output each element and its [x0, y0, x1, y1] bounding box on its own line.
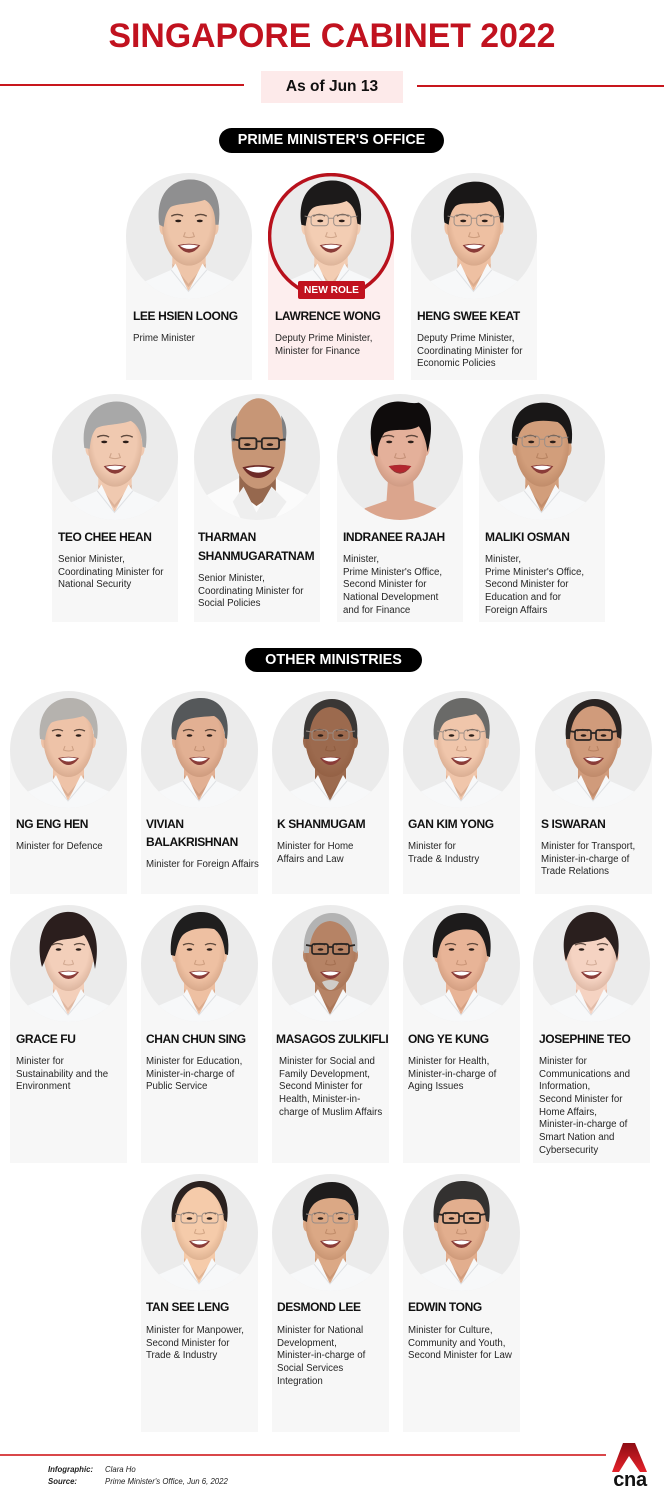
portrait: [126, 173, 252, 292]
title: SINGAPORE CABINET 2022: [108, 17, 555, 55]
portrait: [535, 691, 652, 802]
role: Prime Minister's Office,: [485, 567, 584, 578]
role: Minister for: [408, 841, 456, 852]
role: Minister for Defence: [16, 841, 103, 852]
portrait: [403, 691, 520, 802]
portrait: [337, 394, 463, 520]
role: Minister for Foreign Affairs: [146, 859, 259, 870]
role: Minister for Transport,: [541, 841, 635, 852]
portrait: [403, 905, 520, 1016]
role: Minister for Manpower,: [146, 1325, 244, 1336]
portrait: [272, 691, 389, 802]
name: TEO CHEE HEAN: [58, 530, 151, 544]
role: Home Affairs,: [539, 1107, 597, 1118]
name: [146, 817, 238, 849]
role: Minister for National: [277, 1325, 363, 1336]
role: Second Minister for: [539, 1094, 622, 1105]
role: Minister-in-charge of: [146, 1069, 234, 1080]
name: THARMAN: [198, 530, 256, 544]
card: Indranee Rajah: [337, 394, 463, 622]
name: SHANMUGARATNAM: [198, 548, 314, 562]
icon: cna logo: [612, 1443, 648, 1491]
role: Minister for Culture,: [408, 1325, 493, 1336]
role: Economic Policies: [417, 358, 496, 369]
name: [198, 530, 314, 562]
card: Tharman Shanmugaratnam: [194, 394, 320, 622]
new role badge: [298, 281, 365, 299]
role: Minister-in-charge of: [277, 1350, 365, 1361]
portrait: [10, 691, 127, 802]
role: Integration: [277, 1376, 323, 1387]
card: Teo Chee Hean: [52, 394, 178, 589]
portrait: [403, 1174, 520, 1284]
role: Community and Youth,: [408, 1338, 505, 1349]
role: [146, 1056, 242, 1092]
role: Minister for: [16, 1056, 64, 1067]
card: Vivian Balakrishnan: [141, 691, 258, 869]
role: [275, 333, 372, 357]
role: Prime Minister's Office,: [343, 567, 442, 578]
role: Foreign Affairs: [485, 605, 547, 616]
role: [408, 1325, 512, 1361]
role: Senior Minister,: [58, 554, 125, 565]
role: Social Services: [277, 1363, 343, 1374]
role: [485, 554, 584, 616]
portrait: [194, 394, 320, 520]
role: Affairs and Law: [277, 854, 344, 865]
name: MASAGOS ZULKIFLI: [276, 1032, 388, 1046]
role: [277, 841, 353, 865]
role: Senior Minister,: [198, 573, 265, 584]
portrait: [141, 905, 258, 1016]
portrait: [272, 1174, 389, 1284]
name: GAN KIM YONG: [408, 817, 494, 831]
role: Coordinating Minister for: [58, 567, 164, 578]
card: Maliki Osman: [479, 394, 605, 622]
name: EDWIN TONG: [408, 1300, 482, 1314]
heading: other ministries: [245, 648, 422, 672]
role: [539, 1056, 630, 1156]
role: Minister for Finance: [275, 346, 360, 357]
role: [541, 841, 635, 877]
role: Public Service: [146, 1081, 207, 1092]
portrait with red ring: [268, 173, 394, 290]
role: [408, 1056, 496, 1092]
date badge: As of Jun 13: [286, 78, 378, 95]
card: Chan Chun Sing: [141, 905, 258, 1089]
new role badge: NEW ROLE: [304, 285, 359, 296]
card: S Iswaran: [535, 691, 652, 894]
role: [198, 573, 304, 609]
role: Deputy Prime Minister,: [417, 333, 514, 344]
heading: other ministries: OTHER MINISTRIES: [265, 652, 402, 668]
portrait: [10, 905, 127, 1016]
card: Grace Fu: [10, 905, 127, 1089]
portrait: [52, 394, 178, 513]
role: Trade Relations: [541, 866, 609, 877]
name: MALIKI OSMAN: [485, 530, 570, 544]
role: Environment: [16, 1081, 70, 1092]
role: Sustainability and the: [16, 1069, 108, 1080]
role: Coordinating Minister for: [198, 586, 304, 597]
footer credits: Prime Minister's Office, Jun 6, 2022: [105, 1476, 228, 1486]
role: Second Minister for Law: [408, 1350, 512, 1361]
role: Second Minister for: [146, 1338, 229, 1349]
name: S ISWARAN: [541, 817, 605, 831]
role: [16, 1056, 108, 1092]
role: [408, 841, 480, 865]
name: CHAN CHUN SING: [146, 1032, 246, 1046]
footer credits: Clara Ho: [105, 1465, 136, 1474]
role: Information,: [539, 1081, 590, 1092]
name: K SHANMUGAM: [277, 817, 365, 831]
role: Family Development,: [279, 1069, 370, 1080]
portrait: [141, 1174, 258, 1284]
role: [417, 333, 523, 369]
role: Prime Minister: [133, 333, 195, 344]
role: National Security: [58, 579, 131, 590]
role: Education and for: [485, 592, 561, 603]
name: JOSEPHINE TEO: [539, 1032, 630, 1046]
role: Deputy Prime Minister,: [275, 333, 372, 344]
role: Minister for: [539, 1056, 587, 1067]
role: Minister,: [485, 554, 521, 565]
portrait: [533, 905, 650, 1016]
footer credits: [48, 1465, 228, 1486]
card: Heng Swee Keat: [411, 173, 537, 380]
name: HENG SWEE KEAT: [417, 309, 520, 323]
role: Minister,: [343, 554, 379, 565]
name: ONG YE KUNG: [408, 1032, 489, 1046]
role: Minister-in-charge of: [408, 1069, 496, 1080]
role: Communications and: [539, 1069, 630, 1080]
card: Tan See Leng: [141, 1174, 258, 1360]
role: Minister for Education,: [146, 1056, 242, 1067]
portrait: [479, 394, 605, 513]
role: Minister for Home: [277, 841, 353, 852]
name: LAWRENCE WONG: [275, 309, 380, 323]
name: INDRANEE RAJAH: [343, 530, 445, 544]
role: Health, Minister-in-: [279, 1094, 360, 1105]
role: Trade & Industry: [408, 854, 479, 865]
role: Minister for Social and: [279, 1056, 375, 1067]
card: Desmond Lee: [272, 1174, 389, 1386]
role: Minister-in-charge of: [541, 854, 629, 865]
card: Edwin Tong: [403, 1174, 520, 1358]
portrait: [411, 173, 537, 292]
role: Minister-in-charge of: [539, 1119, 627, 1130]
heading: prime minister's office: PRIME MINISTER'S OFFICE: [238, 132, 425, 148]
role: [343, 554, 442, 616]
name: NG ENG HEN: [16, 817, 88, 831]
role: Second Minister for: [485, 579, 568, 590]
icon: cna logo: cna: [613, 1469, 647, 1491]
card: Masagos Zulkifli: [272, 905, 389, 1117]
name: GRACE FU: [16, 1032, 75, 1046]
name: BALAKRISHNAN: [146, 835, 238, 849]
role: Cybersecurity: [539, 1145, 598, 1156]
name: TAN SEE LENG: [146, 1300, 229, 1314]
card: Lee Hsien Loong: [126, 173, 252, 341]
card: Lawrence Wong (highlighted): [268, 173, 394, 380]
footer credits: Infographic:: [48, 1465, 93, 1474]
heading: prime minister's office: [219, 128, 444, 153]
card: Gan Kim Yong: [403, 691, 520, 864]
role: Second Minister for: [279, 1081, 362, 1092]
role: National Development: [343, 592, 438, 603]
role: Coordinating Minister for: [417, 346, 523, 357]
role: [277, 1325, 366, 1387]
name: LEE HSIEN LOONG: [133, 309, 238, 323]
card: Ong Ye Kung: [403, 905, 520, 1091]
role: Development,: [277, 1338, 337, 1349]
name: VIVIAN: [146, 817, 184, 831]
footer credits: Source:: [48, 1476, 77, 1486]
role: [146, 1325, 244, 1361]
role: and for Finance: [343, 605, 410, 616]
role: Social Policies: [198, 598, 260, 609]
role: Aging Issues: [408, 1081, 463, 1092]
role: [58, 554, 164, 590]
role: [279, 1056, 382, 1118]
name: DESMOND LEE: [277, 1300, 361, 1314]
date badge: [261, 71, 403, 103]
card: Josephine Teo: [533, 905, 650, 1163]
role: Second Minister for: [343, 579, 426, 590]
card: K Shanmugam: [272, 691, 389, 862]
role: charge of Muslim Affairs: [279, 1107, 382, 1118]
card: Ng Eng Hen: [10, 691, 127, 849]
role: Smart Nation and: [539, 1132, 614, 1143]
portrait: [272, 905, 389, 1016]
role: Trade & Industry: [146, 1350, 217, 1361]
portrait: [141, 691, 258, 802]
role: Minister for Health,: [408, 1056, 489, 1067]
